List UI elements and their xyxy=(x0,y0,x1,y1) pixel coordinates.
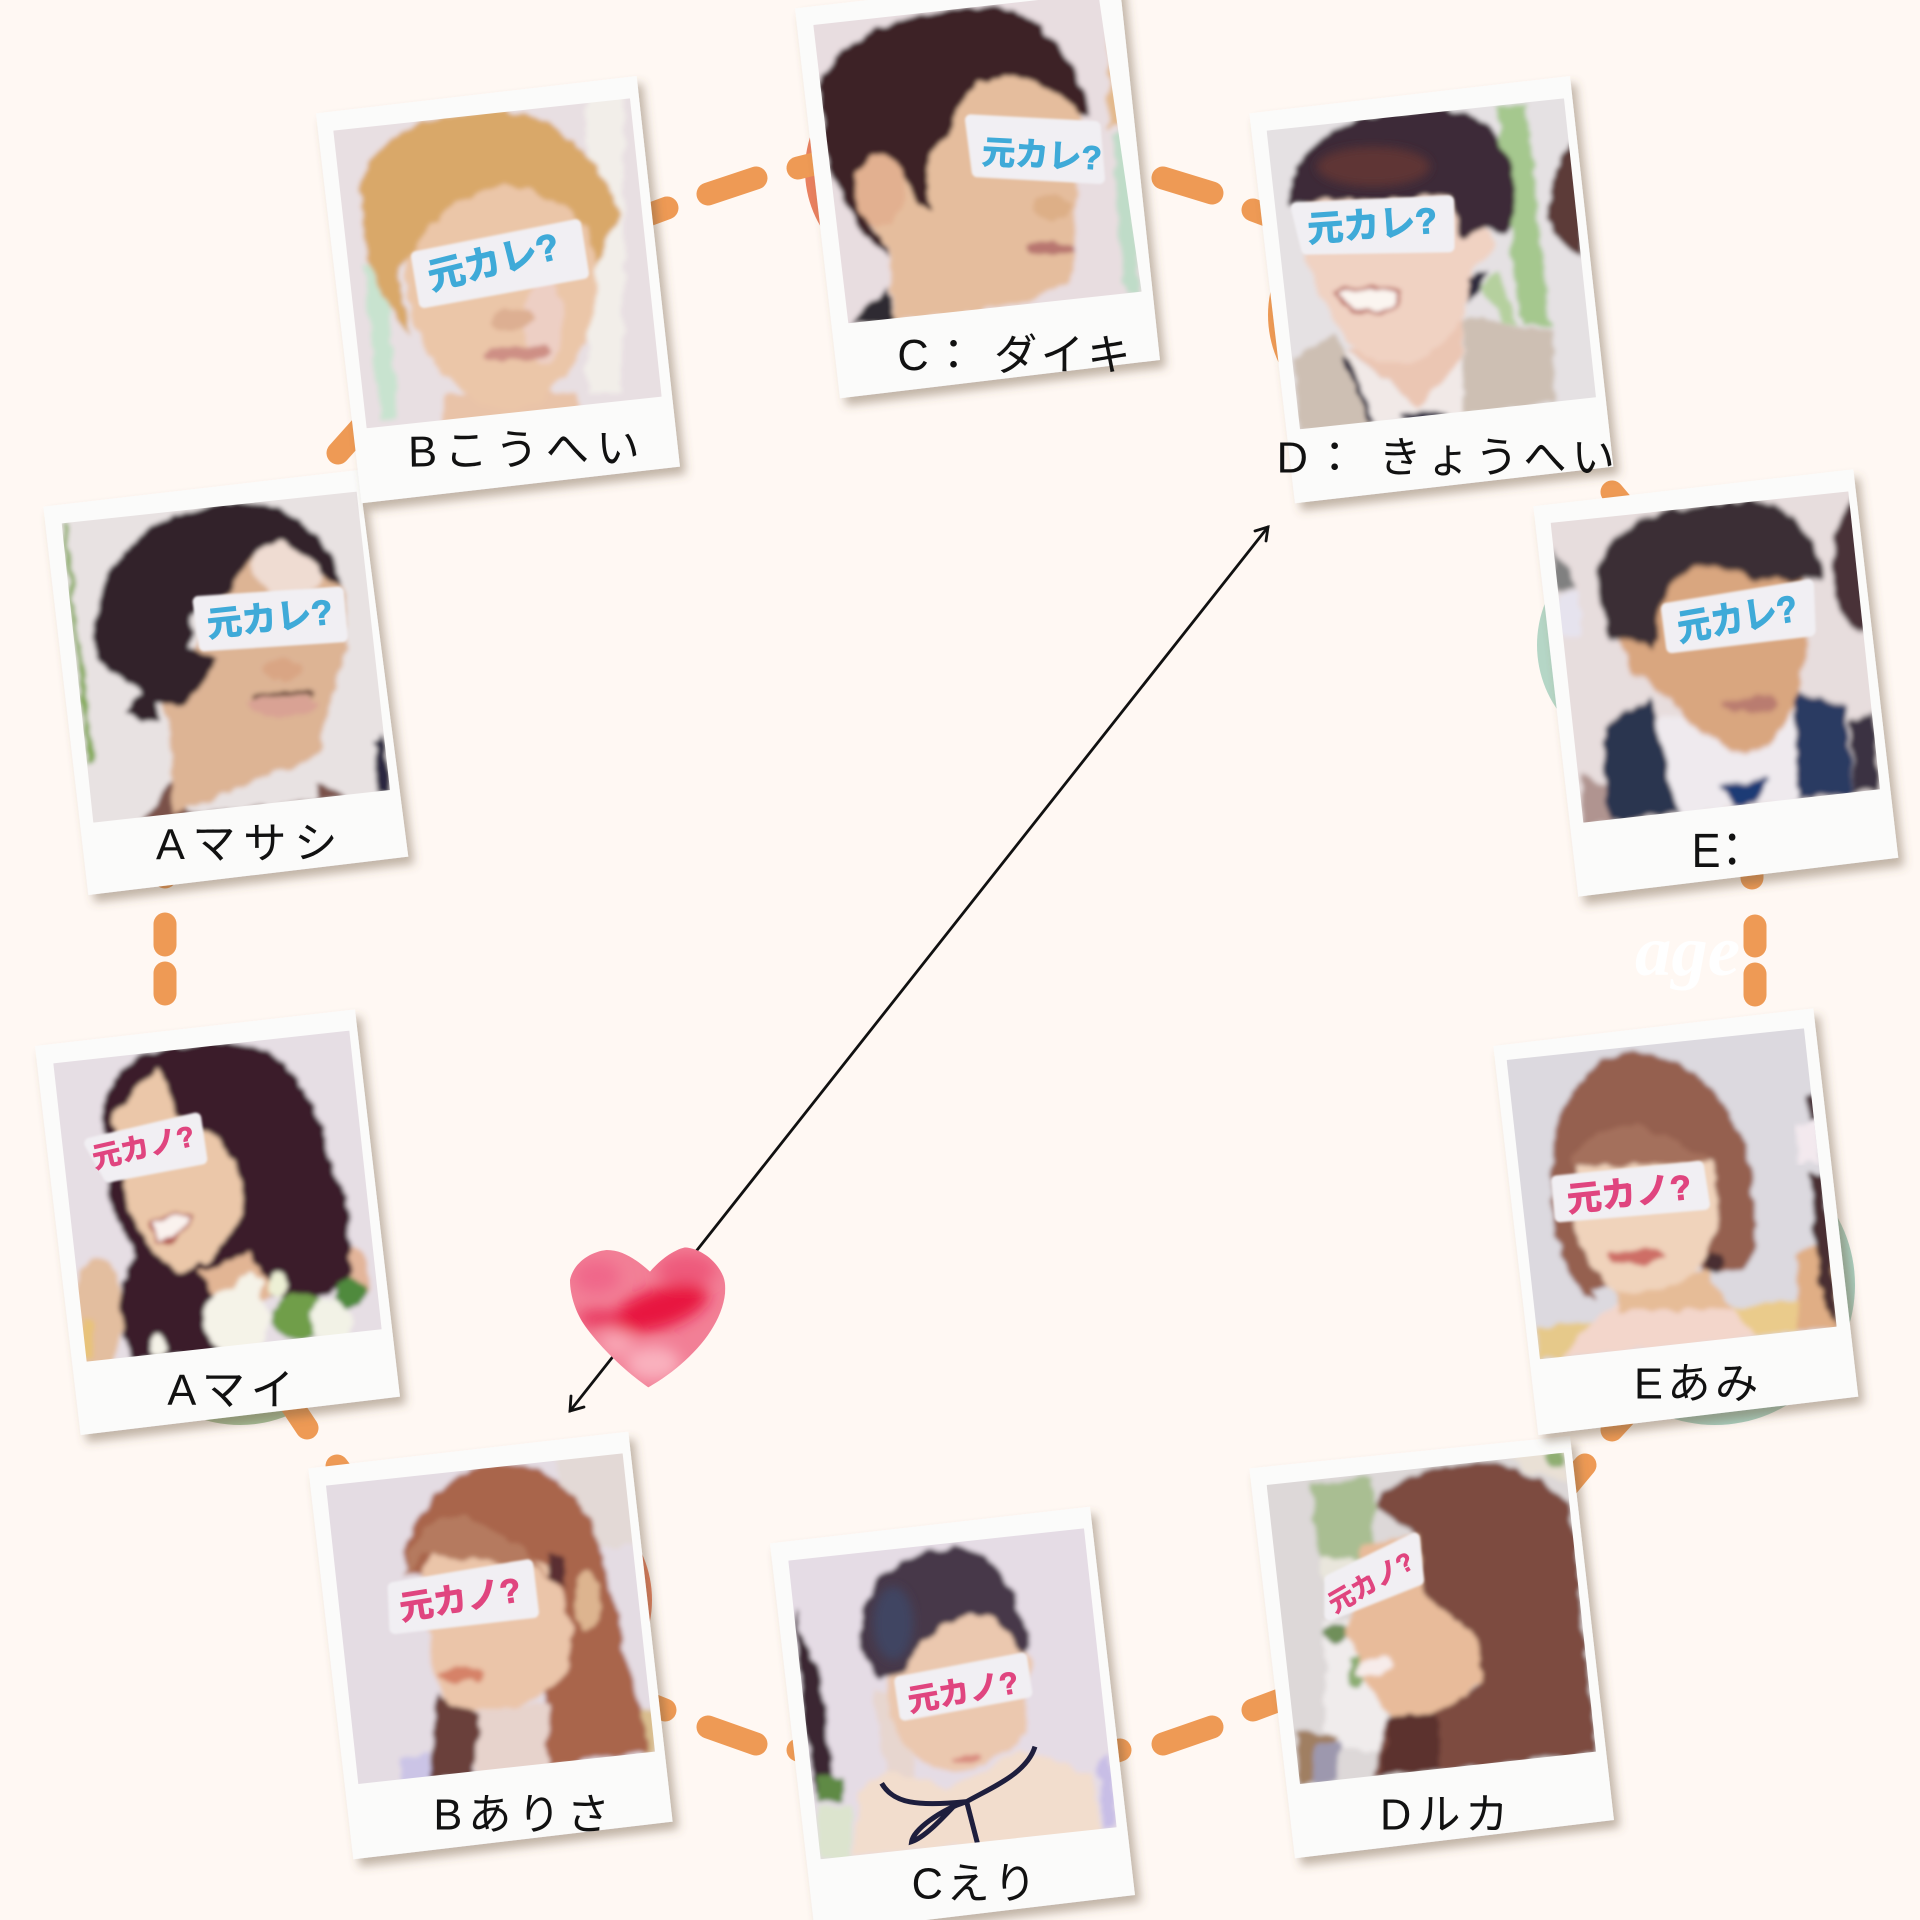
name label: E： xyxy=(1692,824,1744,878)
icon: watercolor heart xyxy=(570,1248,726,1388)
eye tag: 元カレ? xyxy=(205,593,335,645)
photo: kouhei xyxy=(334,98,662,428)
name label: Dルカ xyxy=(1380,1791,1508,1839)
polaroid: E man xyxy=(1533,469,1900,897)
polaroid: A masashi xyxy=(43,470,410,895)
photo: masashi xyxy=(62,492,390,822)
name label: Bありさ xyxy=(433,1791,610,1839)
photo: ruka xyxy=(1266,1452,1596,1784)
eye tag: 元カレ? xyxy=(1306,200,1439,250)
eye tag: 元カレ? xyxy=(423,225,563,298)
polaroid: C daiki xyxy=(793,0,1160,398)
name label: Cえり xyxy=(912,1860,1037,1908)
eye tag: 元カレ? xyxy=(981,134,1103,178)
name label: Bこうへい xyxy=(408,425,640,477)
photo: mai xyxy=(54,1030,382,1362)
background circles xyxy=(115,60,1855,1712)
name label: D： きょうへい xyxy=(1277,435,1615,483)
polaroid: C eri xyxy=(770,1503,1140,1920)
polaroid: D kyouhei xyxy=(1249,73,1620,503)
polaroid: D ruka xyxy=(1249,1433,1620,1858)
polaroid: B kouhei xyxy=(313,73,680,503)
photo: arisa xyxy=(326,1454,655,1784)
eye tag: 元カレ? xyxy=(1675,588,1800,650)
photo: daiki xyxy=(814,0,1142,323)
eye tag: 元カノ? xyxy=(89,1121,198,1175)
name label: Aマイ xyxy=(167,1367,294,1415)
photo: eri xyxy=(788,1528,1116,1859)
eye tag: 元カノ? xyxy=(397,1571,524,1628)
eye tag xyxy=(971,120,1103,178)
hair highlight xyxy=(1317,147,1430,187)
polaroid: A mai xyxy=(33,1009,400,1435)
hair sheen xyxy=(873,1587,913,1660)
arrow: between D and B xyxy=(570,527,1268,1411)
name label: Eあみ xyxy=(1634,1360,1758,1408)
polaroid: B arisa xyxy=(303,1432,673,1859)
eye tag: 元カノ? xyxy=(1565,1169,1693,1220)
dashed orange ring xyxy=(165,160,1755,1762)
eye tag: 元カノ? xyxy=(1324,1547,1419,1619)
name label: C： ダイキ xyxy=(897,332,1131,380)
name label: Aマサシ xyxy=(156,820,338,869)
photo: E man xyxy=(1550,492,1880,822)
photo: kyouhei xyxy=(1266,98,1596,430)
polaroid: E ami xyxy=(1493,1008,1860,1435)
ribbon xyxy=(882,1747,1035,1847)
photo: ami xyxy=(1506,1028,1836,1360)
eye tag: 元カノ? xyxy=(905,1665,1021,1719)
decorative word: age: age xyxy=(1635,911,1740,991)
side tag xyxy=(1795,1120,1818,1163)
